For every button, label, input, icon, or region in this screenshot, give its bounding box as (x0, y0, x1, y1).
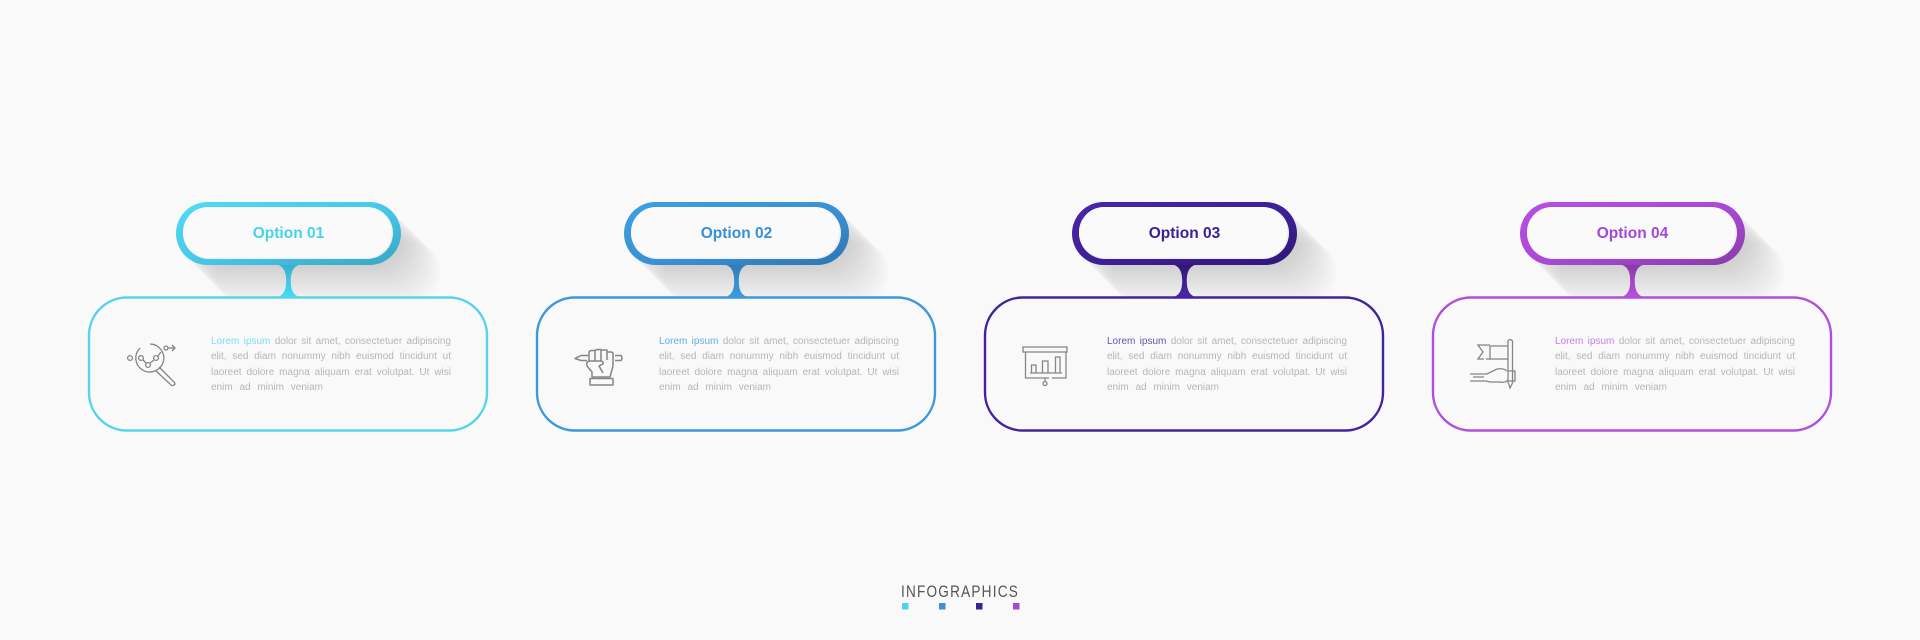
text block (1555, 336, 1795, 393)
pill inner (1079, 207, 1289, 259)
text block (211, 336, 451, 393)
icon: fist with pencil (575, 350, 622, 385)
text block (1107, 336, 1347, 393)
text block: elit, sed diam nonummy nibh euismod tincidunt ut (1107, 351, 1347, 362)
icon: magnifier chart (128, 344, 175, 386)
pill inner (183, 207, 393, 259)
footer logo (901, 583, 1020, 610)
option 01 (88, 202, 488, 432)
connector (274, 264, 303, 298)
connector (1170, 264, 1199, 298)
panel outline (985, 298, 1383, 430)
text block: elit, sed diam nonummy nibh euismod tincidunt ut (1555, 351, 1795, 362)
long shadow (1088, 218, 1329, 296)
footer wordmark: INFOGRAPHICS (901, 583, 1018, 601)
text block: laoreet dolore magna aliquam erat volutpat. Ut wisi (659, 367, 899, 378)
connector (1618, 264, 1647, 298)
pill inner (1527, 207, 1737, 259)
icon: hand holding flag (1470, 340, 1515, 388)
text block: laoreet dolore magna aliquam erat volutpat. Ut wisi (1107, 367, 1347, 378)
title: Option 01 (253, 225, 324, 242)
text block: laoreet dolore magna aliquam erat volutpat. Ut wisi (211, 367, 451, 378)
pill inner (631, 207, 841, 259)
long shadow (1536, 218, 1777, 296)
icon: presentation board (1023, 347, 1067, 386)
title: Option 02 (701, 225, 772, 242)
panel outline (537, 298, 935, 430)
title: Option 03 (1149, 225, 1220, 242)
text block: laoreet dolore magna aliquam erat volutpat. Ut wisi (1555, 367, 1795, 378)
text block: enim ad minim veniam (1107, 382, 1219, 393)
option 03 (984, 202, 1384, 432)
title: Option 04 (1597, 225, 1668, 242)
text block: elit, sed diam nonummy nibh euismod tincidunt ut (211, 351, 451, 362)
text block: elit, sed diam nonummy nibh euismod tincidunt ut (659, 351, 899, 362)
text block (659, 336, 899, 393)
pill frame (176, 202, 401, 265)
option 04 (1432, 202, 1832, 432)
panel outline (1433, 298, 1831, 430)
pill frame (624, 202, 849, 265)
connector (722, 264, 751, 298)
footer colour squares (902, 603, 1020, 610)
long shadow (192, 218, 433, 296)
text block: enim ad minim veniam (211, 382, 323, 393)
pill frame (1520, 202, 1745, 265)
option 02 (536, 202, 936, 432)
long shadow (640, 218, 881, 296)
text block: enim ad minim veniam (659, 382, 771, 393)
panel outline (89, 298, 487, 430)
text block: Lorem ipsum dolor sit amet, consectetuer adipiscing (659, 336, 899, 347)
pill frame (1072, 202, 1297, 265)
text block: Lorem ipsum dolor sit amet, consectetuer adipiscing (211, 336, 451, 347)
text block: Lorem ipsum dolor sit amet, consectetuer adipiscing (1107, 336, 1347, 347)
text block: Lorem ipsum dolor sit amet, consectetuer adipiscing (1555, 336, 1795, 347)
text block: enim ad minim veniam (1555, 382, 1667, 393)
